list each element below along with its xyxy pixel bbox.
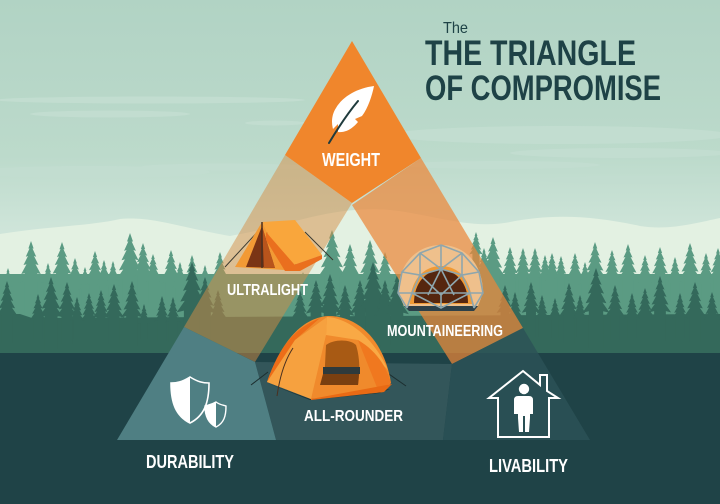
panel: mountaineering band xyxy=(352,158,523,364)
background: sky xyxy=(0,0,720,260)
panel: all-rounder floor xyxy=(255,362,452,440)
icon: shields xyxy=(171,377,226,427)
small shield xyxy=(205,402,226,427)
title xyxy=(425,20,661,108)
label: mountaineering: MOUNTAINEERING xyxy=(387,323,503,340)
guy lines xyxy=(251,365,406,386)
icon: house with person xyxy=(489,371,558,437)
label: ultralight: ULTRALIGHT xyxy=(227,282,308,299)
background: pale hills xyxy=(0,209,720,300)
background: dark ground xyxy=(0,353,720,504)
label: livability: LIVABILITY xyxy=(489,456,568,476)
panel: durability corner xyxy=(117,327,276,440)
guy lines xyxy=(225,227,333,270)
label: weight: WEIGHT xyxy=(322,150,380,170)
label: durability: DURABILITY xyxy=(146,452,234,472)
background: front tree line xyxy=(0,262,720,353)
panel: weight apex xyxy=(285,41,421,203)
panel: livability corner xyxy=(443,328,590,440)
title kicker: The xyxy=(443,20,468,37)
title line 1: THE TRIANGLE xyxy=(425,34,636,73)
label: all-rounder: ALL-ROUNDER xyxy=(304,408,403,425)
icon: ultralight tent xyxy=(225,220,333,271)
icon: geodesic dome tent xyxy=(398,245,483,311)
background: back tree line xyxy=(0,230,720,353)
panel: ultralight band xyxy=(184,155,352,362)
title line 2: OF COMPROMISE xyxy=(425,69,661,108)
large shield xyxy=(171,377,209,423)
icon: all-rounder dome tent xyxy=(251,316,406,400)
background: clouds xyxy=(0,96,720,184)
icon: feather xyxy=(329,86,374,143)
